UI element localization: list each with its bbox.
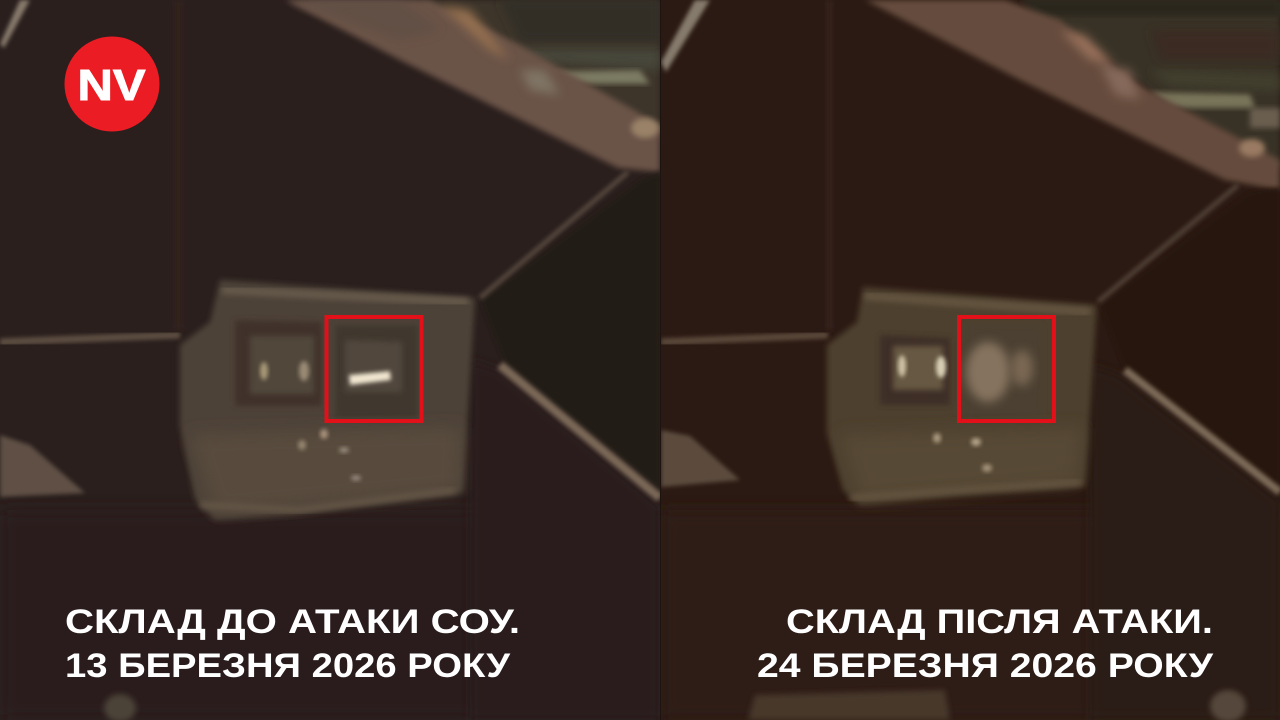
compound: [827, 287, 1097, 505]
dark lot on the right: [480, 172, 660, 490]
dark lot on the right: [1102, 186, 1280, 366]
diagonal track: [285, 0, 660, 172]
highlight box: warehouse after the attack: [959, 317, 1054, 421]
logo: NV badge: NV: [78, 61, 146, 110]
caption: before the attack: СКЛАД ДО АТАКИ СОУ.: [65, 603, 520, 641]
light patch on the left edge: [661, 430, 740, 487]
caption: after the attack: [757, 603, 1214, 685]
corner streak: [661, 0, 710, 72]
diagonal track: [865, 0, 1280, 190]
caption: after the attack: 24 БЕРЕЗНЯ 2026 РОКУ: [757, 647, 1214, 685]
light patch on the left edge: [0, 435, 85, 497]
access roads: [480, 172, 628, 298]
caption: before the attack: [65, 603, 520, 685]
panel: satellite image after the attack: [661, 0, 1280, 720]
corner streak: [0, 0, 30, 48]
smudge at bottom: [104, 694, 136, 720]
access roads: [1098, 185, 1238, 302]
field in the top right corner: [1052, 14, 1280, 160]
caption: after the attack: СКЛАД ПІСЛЯ АТАКИ.: [786, 603, 1213, 641]
caption: before the attack: 13 БЕРЕЗНЯ 2026 РОКУ: [65, 647, 511, 685]
smudges at bottom: [748, 690, 950, 720]
highlight box: warehouse before the attack: [326, 317, 422, 421]
divider between the panels: [660, 0, 661, 720]
panel: satellite image before the attack: [0, 0, 660, 720]
logo: NV badge: [64, 36, 160, 132]
field in the top right corner: [433, 0, 660, 122]
compound: [180, 280, 475, 520]
bright roof fragment: [349, 371, 391, 385]
